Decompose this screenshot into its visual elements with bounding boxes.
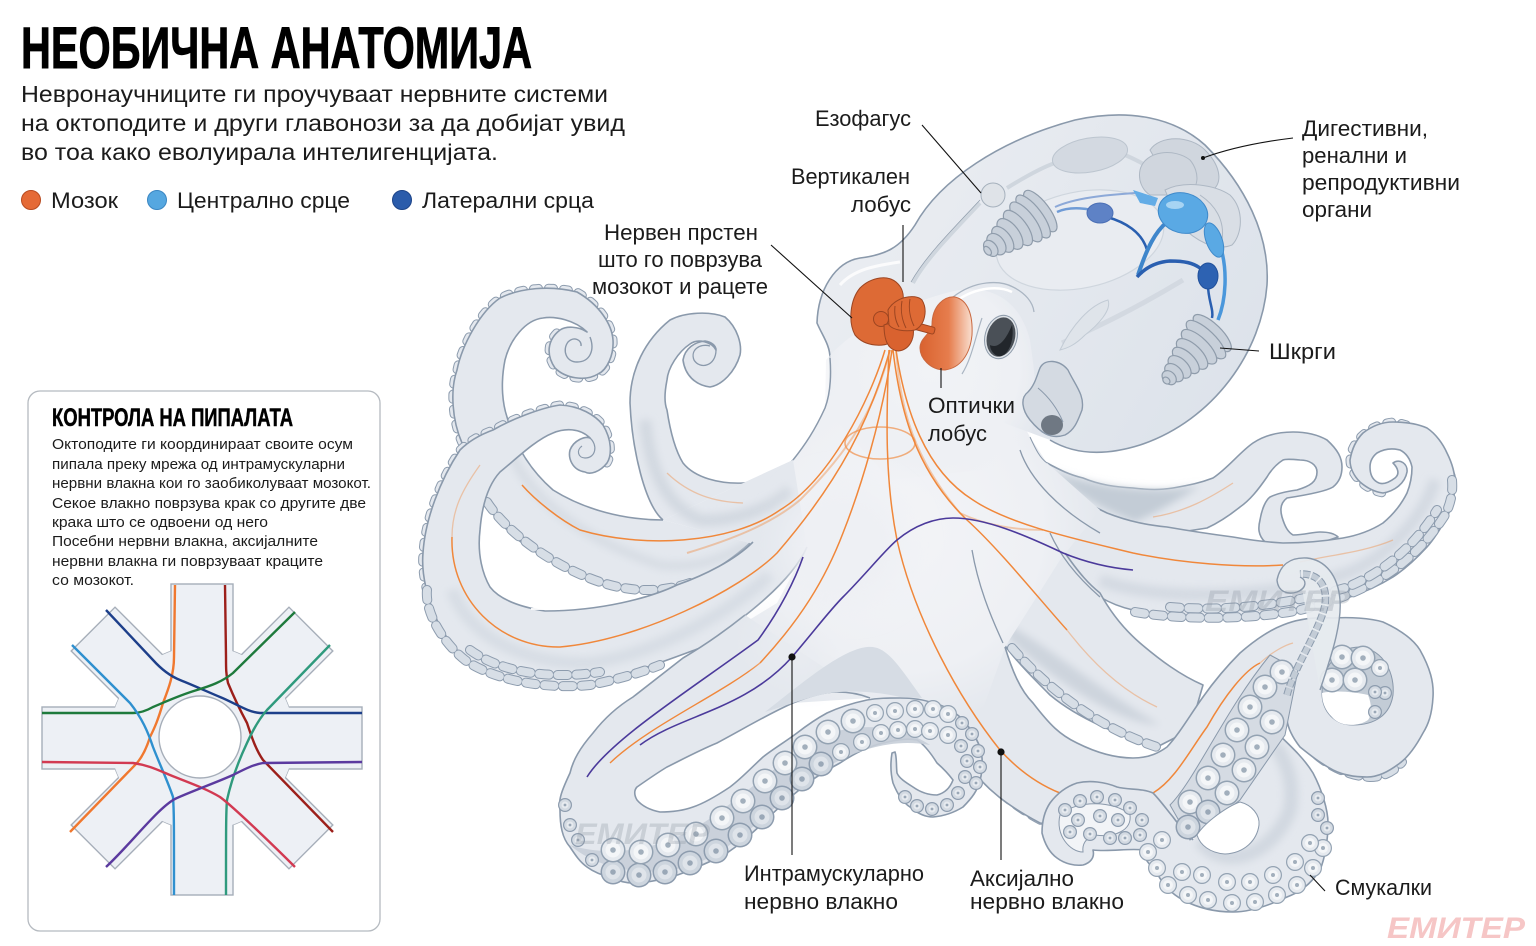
label: digestive organs: ренални и [1302,143,1407,168]
icon: upper gill [970,185,1063,273]
inner body oval [987,175,1173,305]
label: digestive organs: Дигестивни, [1302,116,1428,141]
icon: central heart and vessels [1055,187,1228,320]
arm loop interior [1322,647,1393,725]
icon: funnel [1023,361,1083,437]
octopus central body [700,260,1100,765]
label: vertical lobe [791,164,911,282]
arm: back left curled [453,288,750,592]
intro text: во тоа како еволуирала интелигенцијата. [21,139,498,165]
arm: right upper S-curve [1040,432,1342,550]
organ: esophagus and crop [911,132,1145,283]
watermarks: ЕМИТЕР [575,818,711,851]
label: axial nerve fiber: Аксијално [970,866,1074,891]
icon: eye [980,312,1022,362]
arm: right with spiral tip [1050,422,1455,618]
soft body glow over arm bases [743,487,907,691]
optic lobe [920,297,972,370]
arm: lower loop with suckers and small curl [1042,655,1334,912]
label: vertical lobe: Вертикален [791,164,910,189]
legend: Централно срце [177,188,350,213]
label: esophagus [815,106,981,193]
octopus illustration [423,115,1455,912]
organ: digestive, renal, reproductive [1139,139,1240,247]
panel text: крака што се одвоени од него [52,514,268,531]
panel text: нервни влакна кои го заобиколуваат мозокот. [52,475,371,492]
arm: lower right behind [950,550,1203,747]
label: axial nerve fiber [970,748,1124,914]
vertical and central lobes [851,278,903,345]
head [825,289,1047,480]
label: optic lobe: Оптички [928,393,1015,418]
legend: Латерални срца [422,188,595,213]
panel: tentacle control [28,391,380,931]
arm: left front with curl [423,405,807,688]
intro text: на октоподите и други главонози за да добијат увид [21,110,626,136]
label: nerve ring [592,220,852,318]
panel text: нервни влакна ги поврзуваат краците [52,553,323,570]
intro text: Невронаучниците ги проучуваат нервните системи [21,81,608,107]
diagram: eight-arm nerve network [42,584,362,895]
arm: lower right with large loop [965,618,1433,830]
label: gills [1220,339,1336,364]
mantle [793,115,1267,480]
label: esophagus: Езофагус [815,106,911,131]
label: nerve ring: Нервен прстен [604,220,758,245]
label: suckers: Смукалки [1335,875,1432,900]
panel heading: КОНТРОЛА НА ПИПАЛАТА [52,404,293,432]
label: intramuscular nerve fiber [744,653,924,914]
sucker band [1170,655,1298,840]
panel text: со мозокот. [52,572,134,589]
label: digestive organs: репродуктивни [1302,170,1460,195]
label: intramuscular nerve fiber: нервно влакно [744,889,898,914]
label: digestive organs [1201,116,1460,222]
label: gills: Шкрги [1269,339,1336,364]
arm tip crossing over [1277,558,1340,695]
panel text [52,436,371,589]
label: vertical lobe: лобус [851,192,911,217]
icon: lower gill [1146,309,1237,401]
watermarks [575,585,1526,945]
nerve fibers [452,350,1293,793]
label: nerve ring: што го поврзува [598,247,763,272]
title: НЕОБИЧНА АНАТОМИЈА [21,16,532,81]
label: nerve ring: мозокот и рацете [592,274,768,299]
label: optic lobe [928,368,1015,446]
label: axial nerve fiber: нервно влакно [970,889,1124,914]
legend [22,188,595,213]
label: intramuscular nerve fiber: Интрамускуларно [744,861,924,886]
panel text: Посебни нервни влакна, аксијалните [52,533,318,550]
body folds and outlines [972,437,1100,643]
legend: Мозок [51,188,118,213]
brain [851,278,972,370]
loop hole [1197,802,1259,854]
watermarks: ЕМИТЕР [1205,585,1351,618]
panel text: пипала преку мрежа од интрамускуларни [52,456,345,473]
arm: bottom left with sucker rows [558,615,987,888]
label: digestive organs: органи [1302,197,1372,222]
panel text: Октоподите ги координираат своите осум [52,436,353,453]
intro text [21,81,626,165]
panel text: Секое влакно поврзува крак со другите две [52,495,366,512]
label: optic lobe: лобус [928,421,987,446]
watermarks: ЕМИТЕР [1387,912,1526,945]
arm: left back curl [630,313,830,547]
